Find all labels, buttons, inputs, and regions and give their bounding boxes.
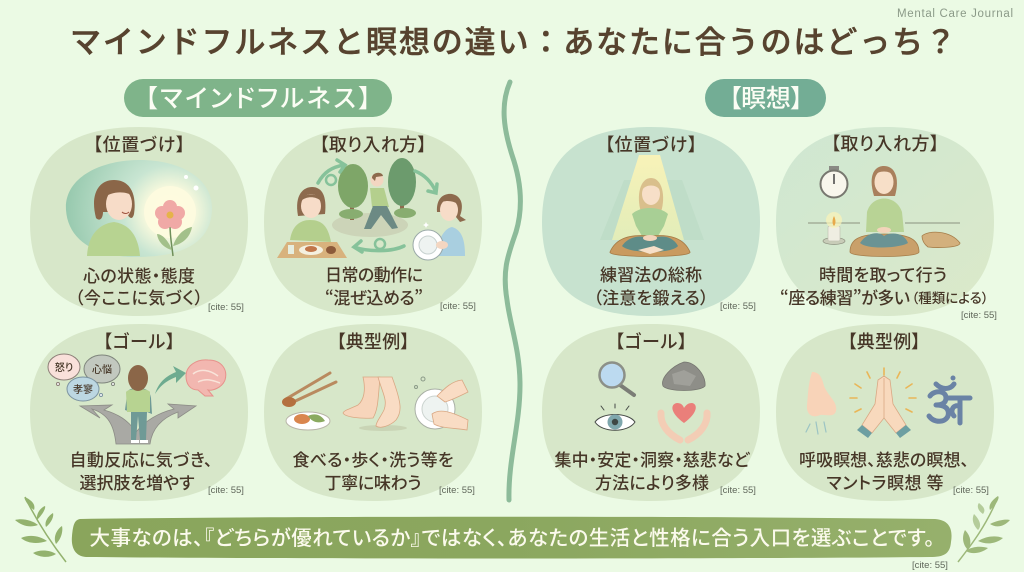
heading: 【取り入れ方】 [320,131,426,157]
title: マインドフルネスと瞑想の違い：あなたに合うのはどっち？ [70,17,956,62]
panel: meditation adoption: “座る練習”が多い [780,284,910,309]
description: 食べる・歩く・洗う等を [292,446,454,471]
journal credit: Mental Care Journal [897,8,1013,20]
panel: meditation examples: マントラ瞑想 等 [826,469,944,494]
illustration: nose, praying hands, om symbol [806,368,970,438]
description: 練習法の総称 [600,261,702,286]
panel: mindfulness examples [264,324,482,501]
panel: meditation examples [776,324,994,501]
citation: [cite: 55] [953,485,989,496]
citation: [cite: 55] [720,485,756,496]
heading: 【取り入れ方】 [831,130,939,156]
illustration: magnifier, rock, eye, heart [595,362,707,440]
description: 心の状態・態度 [83,262,195,287]
citation: [cite: 55] [720,301,756,312]
section header: meditation [705,79,826,117]
panel: meditation adoption: （種類による） [912,287,988,307]
takeaway banner [72,517,952,558]
wavy divider [504,82,520,500]
citation: [cite: 55] [208,485,244,496]
illustration: thoughts and fork in path: 心悩 [92,361,112,376]
panel: meditation positioning [542,127,760,316]
description: 時間を取って行う [819,261,947,286]
heading: 【ゴール】 [103,328,175,354]
illustration: daily routine cycle [277,158,466,260]
illustration: timed seated practice [808,166,960,256]
description: 日常の動作に [325,261,423,286]
heading: 【典型例】 [848,328,920,354]
panel: mindfulness goal: 選択肢を増やす [80,469,194,494]
panel: mindfulness positioning: （今ここに気づく） [75,284,203,309]
description: 自動反応に気づき、 [70,446,212,471]
panel: meditation goal: 方法により多様 [595,469,709,494]
illustration: seated figure under light [600,155,704,256]
heading: 【典型例】 [336,328,410,354]
icon: left leaf sprig [15,497,66,562]
illustration: eating, walking, washing [282,373,468,431]
section header: meditation: 【瞑想】 [729,79,803,115]
illustration: thoughts and fork in path [48,354,226,444]
takeaway banner: 大事なのは、『どちらが優れているか』ではなく、あなたの生活と性格に合う入口を選ぶことです。 [90,521,934,551]
heading: 【位置づけ】 [93,131,185,157]
panel: mindfulness positioning [30,127,248,316]
panel: meditation positioning: （注意を鍛える） [594,284,708,309]
heading: 【ゴール】 [615,328,687,354]
icon: right leaf sprig [958,496,1010,562]
panel: mindfulness goal [30,324,248,501]
illustration: thoughts and fork in path: 怒り [55,359,73,374]
panel: meditation goal [542,324,760,501]
description: 呼吸瞑想、慈悲の瞑想、 [799,446,969,471]
citation: [cite: 55] [439,485,475,496]
section header: mindfulness: 【マインドフルネス】 [145,79,371,115]
panel: mindfulness adoption: “混ぜ込める” [325,284,423,309]
description: 集中・安定・洞察・慈悲など [554,446,751,471]
panel: mindfulness adoption [264,127,482,316]
citation: [cite: 55] [440,301,476,312]
panel: meditation adoption [776,127,997,321]
citation: banner: [cite: 55] [912,560,948,571]
panel: mindfulness examples: 丁寧に味わう [324,469,422,494]
illustration: thoughts and fork in path: 孝寥 [73,381,93,396]
heading: 【位置づけ】 [605,131,697,157]
citation: [cite: 55] [961,310,997,321]
illustration: woman and glowing flower [66,160,212,257]
citation: [cite: 55] [208,302,244,313]
